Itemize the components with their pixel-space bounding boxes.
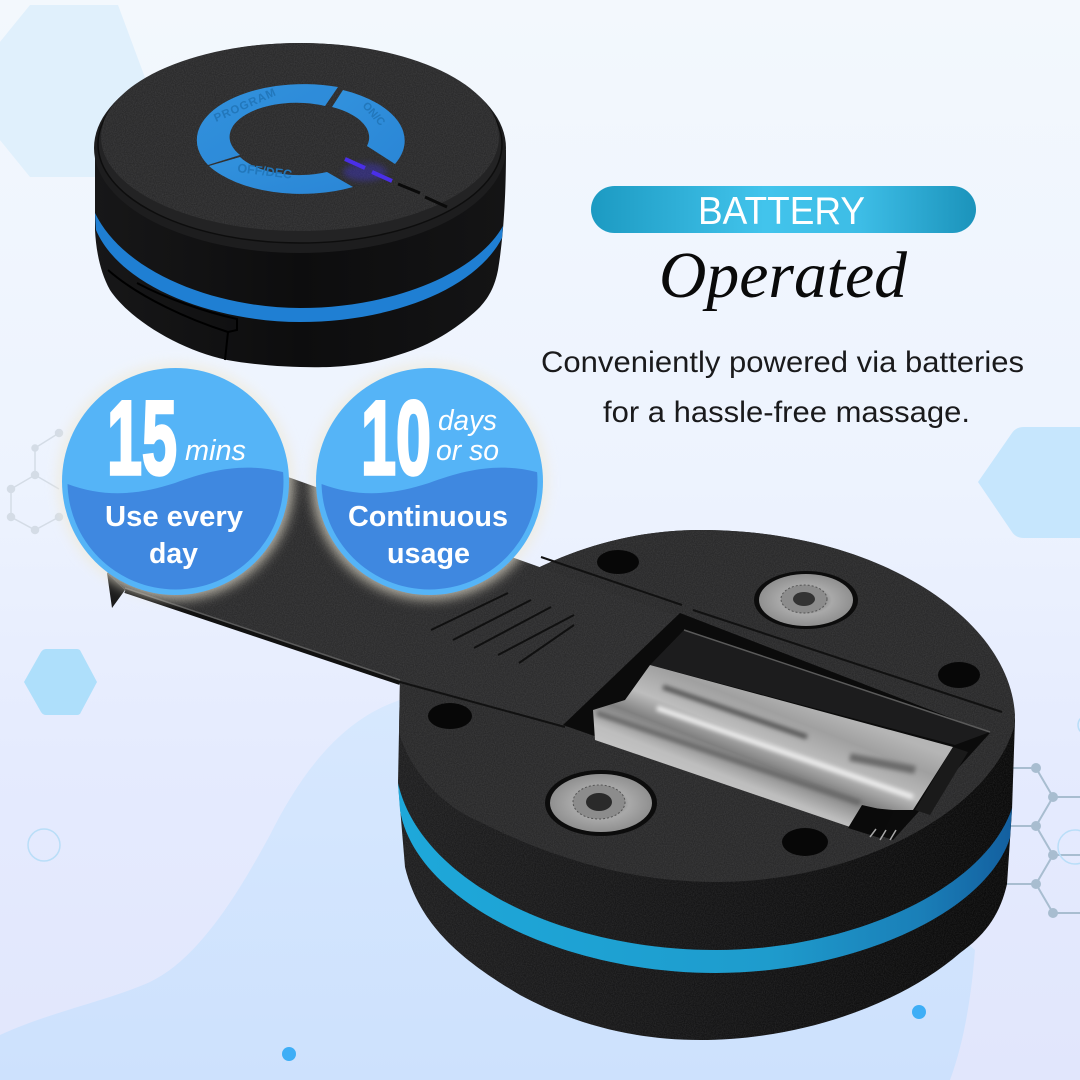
ring button: on/c	[332, 90, 405, 164]
ring button: off/dec	[209, 157, 353, 194]
battery terminal	[915, 747, 968, 815]
screw: top	[754, 571, 858, 629]
ring button: program	[197, 84, 338, 165]
badge: 15 mins: mins	[185, 435, 246, 467]
wall highlight	[684, 630, 990, 732]
heading pill: battery	[591, 186, 976, 233]
battery end bracket	[848, 805, 893, 838]
circle outline: right	[1058, 830, 1080, 864]
badge: 10 days: usage	[387, 538, 470, 570]
device: open battery compartment	[107, 477, 1015, 1040]
badge: 10 days: 10	[361, 380, 431, 497]
body text: Conveniently powered via batteries	[541, 346, 1024, 379]
badge: 15 mins: Use every	[105, 501, 243, 533]
blue stripe	[95, 213, 503, 322]
top face	[399, 530, 1015, 882]
screw: bottom	[545, 770, 657, 836]
heading pill: battery: BATTERY	[698, 190, 865, 233]
battery spring	[870, 829, 896, 840]
rail lines	[541, 557, 1002, 712]
badge: 10 days	[312, 364, 548, 600]
blue stripe	[398, 783, 1012, 973]
badge: 10 days: Continuous	[348, 501, 508, 533]
top face	[101, 43, 499, 231]
indicator lights	[345, 159, 447, 207]
ring button: program: PROGRAM	[212, 87, 278, 125]
badge: 15 mins: 15	[107, 380, 177, 497]
badge: 15 mins: day	[149, 538, 198, 570]
heading: operated: Operated	[659, 239, 908, 312]
hexagon: left small	[24, 649, 97, 715]
badge: 10 days: or so	[436, 435, 499, 467]
batteries	[593, 665, 953, 827]
ring button: on/c: ON/C	[360, 100, 387, 128]
hexagon: top left	[0, 5, 150, 177]
molecule network: left	[8, 430, 62, 534]
hexagon: right	[978, 427, 1080, 538]
device body	[95, 150, 506, 367]
compartment seam	[108, 270, 237, 360]
top rim	[94, 43, 506, 253]
badge: 15 mins	[58, 364, 294, 600]
battery door lever	[107, 477, 682, 727]
mounting holes	[428, 550, 980, 856]
body text	[541, 346, 1024, 429]
badge: 10 days: days	[438, 405, 497, 437]
compartment back wall	[650, 630, 990, 745]
battery compartment	[563, 613, 990, 840]
dot: bottom right	[912, 1005, 926, 1019]
rim line	[98, 45, 502, 243]
device: top view with control ring	[94, 43, 506, 367]
circle outline: right top	[1078, 715, 1080, 735]
ring button: off/dec: OFF/DEC	[237, 161, 293, 182]
dot: bottom left	[282, 1047, 296, 1061]
molecule network: right	[1000, 764, 1080, 917]
device body	[398, 530, 1015, 1040]
light glow	[343, 163, 387, 181]
circle outline	[28, 829, 60, 861]
door grooves	[431, 593, 574, 663]
body text: for a hassle-free massage.	[603, 396, 970, 429]
